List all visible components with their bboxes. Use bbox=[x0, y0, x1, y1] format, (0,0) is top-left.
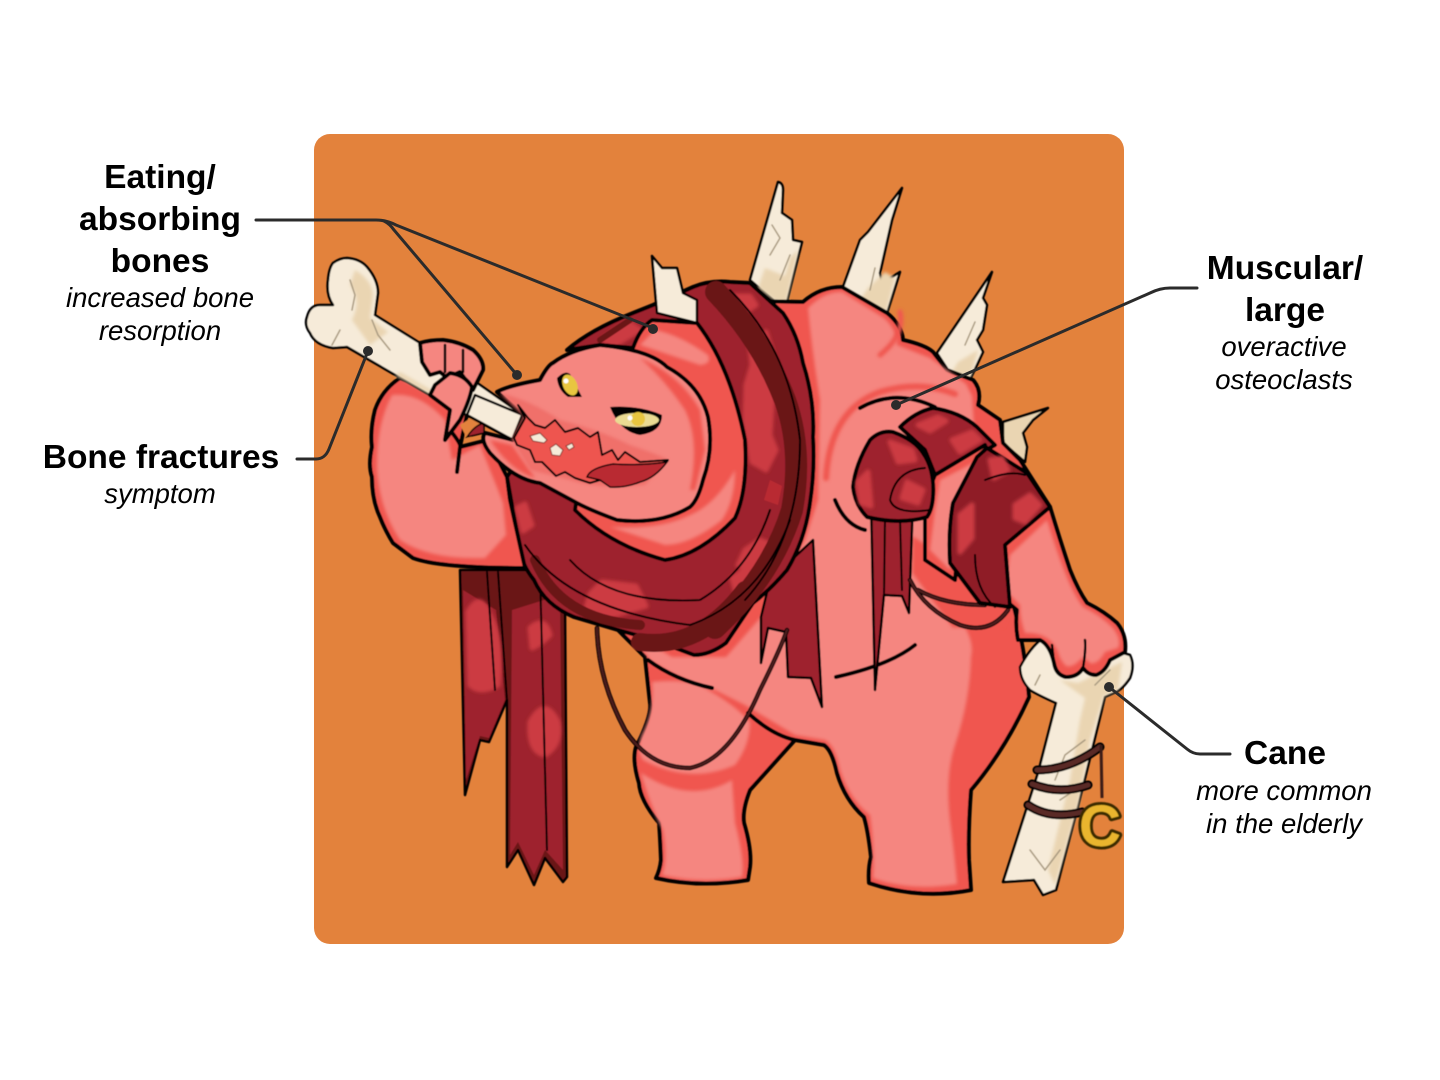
head spike bbox=[652, 256, 697, 323]
mouth bbox=[514, 405, 668, 486]
leg and belly creases bbox=[648, 645, 915, 740]
label: eating/absorbing bones: absorbing bbox=[79, 201, 241, 238]
cane bone bbox=[1003, 638, 1132, 895]
big scarf around neck bbox=[507, 282, 814, 655]
label: muscular/large: large bbox=[1245, 292, 1325, 329]
back scarf strips bbox=[460, 570, 567, 885]
scarf dark folds bbox=[535, 292, 796, 643]
label: muscular/large: overactive bbox=[1221, 331, 1347, 362]
label: bone fractures: Bone fractures bbox=[43, 439, 279, 476]
cord wraps bbox=[1028, 747, 1100, 815]
arm wrap bbox=[949, 448, 1050, 607]
label: muscular/large bbox=[1207, 250, 1363, 395]
chest shadow crescents bbox=[826, 312, 1010, 627]
left eye bbox=[557, 372, 582, 398]
shoulder wrap bbox=[900, 408, 995, 580]
head with face bbox=[483, 345, 710, 521]
held bone bbox=[306, 258, 523, 440]
right arm and hand bbox=[993, 507, 1125, 677]
illustration: osteoporosis monster bbox=[306, 182, 1132, 895]
label: muscular/large: Muscular/ bbox=[1207, 250, 1363, 287]
hand gripping bone bbox=[420, 340, 483, 440]
label: muscular/large: osteoclasts bbox=[1215, 364, 1353, 395]
panel: orange background bbox=[314, 134, 1124, 944]
leader lines and dots bbox=[256, 220, 1230, 754]
shoulder knot bbox=[853, 432, 933, 521]
bone end in mouth bbox=[467, 395, 523, 440]
label: cane: in the elderly bbox=[1206, 808, 1364, 839]
broken teeth bbox=[530, 433, 574, 456]
label: eating/absorbing bones bbox=[66, 159, 254, 346]
back spikes bbox=[750, 182, 1048, 462]
gap between arm and head bbox=[460, 412, 490, 440]
label: eating/absorbing bones: bones bbox=[111, 243, 209, 280]
label: eating/absorbing bones: Eating/ bbox=[104, 159, 216, 196]
label: cane bbox=[1196, 735, 1372, 839]
left arm bbox=[370, 378, 525, 568]
right eye bbox=[610, 407, 662, 435]
scarf lighter patches bbox=[517, 296, 776, 618]
label: cane: more common bbox=[1196, 775, 1372, 806]
tongue bbox=[587, 462, 667, 487]
label: eating/absorbing bones: resorption bbox=[99, 315, 221, 346]
hanging scarf strips bbox=[761, 500, 913, 707]
label: cane: Cane bbox=[1244, 735, 1326, 772]
skin highlights bbox=[632, 292, 975, 887]
pendant letter C: C bbox=[1079, 794, 1121, 859]
label: bone fractures: symptom bbox=[104, 478, 216, 509]
label: eating/absorbing bones: increased bone bbox=[66, 282, 254, 313]
necklace cord bbox=[597, 580, 1008, 768]
hood bbox=[575, 320, 746, 560]
torso and legs bbox=[618, 287, 1060, 894]
label: bone fractures bbox=[43, 439, 279, 509]
